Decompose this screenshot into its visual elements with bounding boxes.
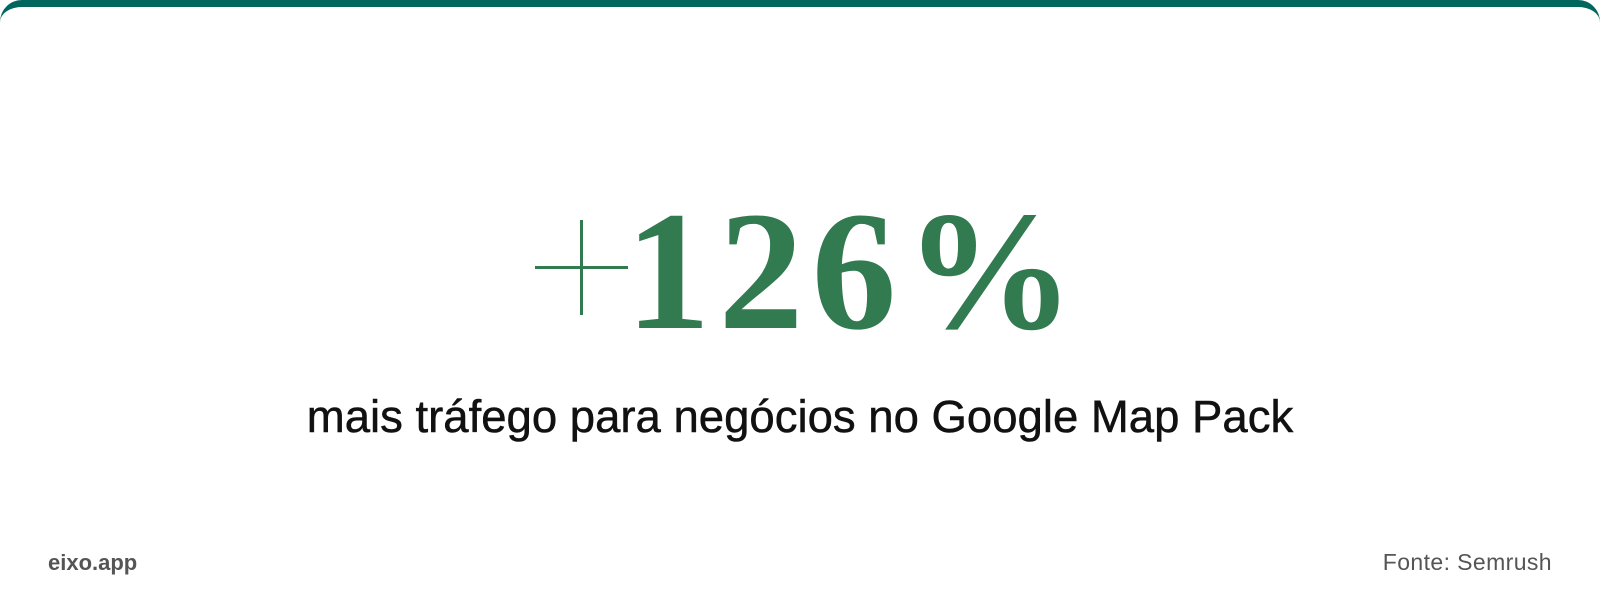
brand footer: eixo.app: [48, 550, 137, 575]
source footer: Fonte: Semrush: [1383, 549, 1552, 575]
headline number: 126%: [626, 177, 1082, 365]
subtitle: mais tráfego para negócios no Google Map Pack: [307, 391, 1293, 442]
